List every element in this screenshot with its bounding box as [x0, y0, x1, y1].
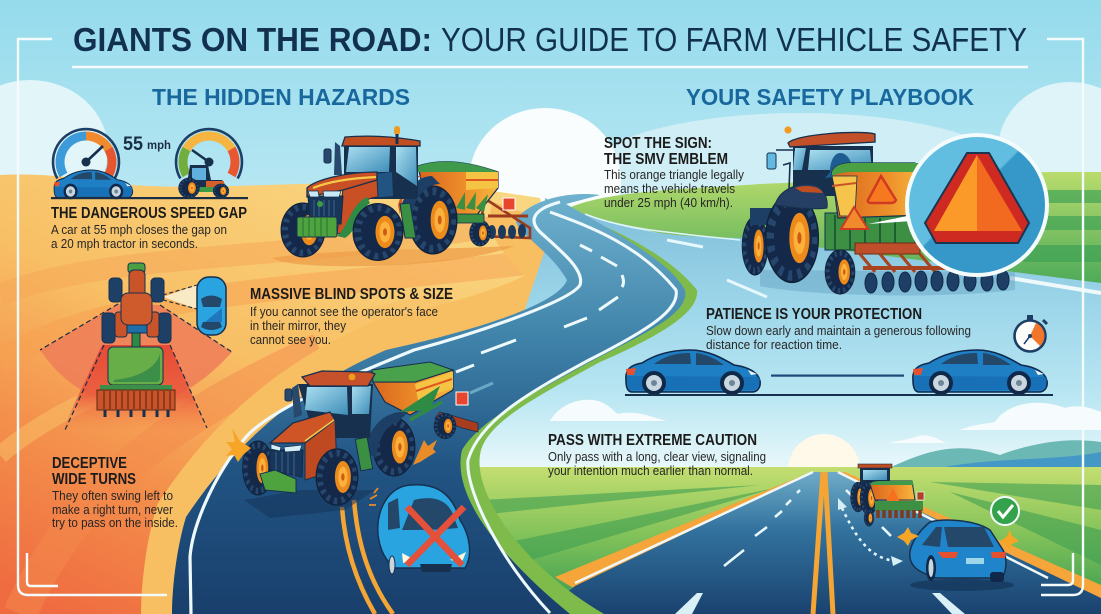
text block: speed gap: A car at 55 mph closes the gap on [51, 222, 227, 237]
panel: lower right fields and highway [440, 434, 1101, 614]
panel: right upper hill and light road [470, 172, 1101, 470]
tractor: hidden hazards hero [272, 126, 530, 266]
text block: pass with caution [548, 432, 766, 478]
title: GIANTS ON THE ROAD: [73, 21, 432, 58]
text block: smv emblem: under 25 mph (40 km/h). [604, 195, 733, 210]
top view car [197, 277, 226, 335]
icon: check mark [991, 497, 1019, 525]
icon: rear dust [413, 440, 437, 465]
text block: wide turns: DECEPTIVE [52, 455, 127, 472]
text block: blind spots [250, 286, 453, 347]
icon: stopwatch [1014, 315, 1047, 352]
panel: left sand field [0, 174, 567, 614]
text block: wide turns: try to pass on the inside. [52, 515, 178, 530]
text block: patience: PATIENCE IS YOUR PROTECTION [706, 306, 922, 323]
text block: blind spots: If you cannot see the operator's face [250, 304, 438, 319]
arrow: passing path [838, 498, 903, 566]
callout: magnified smv emblem [868, 135, 1047, 275]
text block: pass with caution: your intention much earlier than normal. [548, 463, 753, 478]
text block: patience: Slow down early and maintain a generous following [706, 323, 971, 338]
text block: pass with caution: Only pass with a long, clear view, signaling [548, 449, 766, 464]
tractor: highway distant [850, 464, 924, 526]
icon: collision spark [226, 428, 251, 462]
icon: right turn signal [1001, 530, 1019, 550]
text: 55 mph: 55 [123, 134, 143, 155]
text block: pass with caution: PASS WITH EXTREME CAUTION [548, 432, 757, 449]
car: passing rear view [910, 520, 1014, 591]
blind spot zones [40, 285, 232, 430]
text: 55 mph: mph [147, 138, 171, 152]
text block: speed gap [51, 205, 247, 251]
upper clouds [0, 80, 1101, 252]
text block: smv emblem: SPOT THE SIGN: [604, 135, 712, 152]
heading: safety playbook: YOUR SAFETY PLAYBOOK [686, 84, 974, 110]
diagram: following distance cars [625, 350, 1053, 396]
text block: blind spots: in their mirror, they [250, 318, 346, 333]
icon: left turn signal [897, 527, 919, 546]
text block: speed gap: a 20 mph tractor in seconds. [51, 236, 198, 251]
text block: patience: distance for reaction time. [706, 337, 842, 352]
diagram: tractor blind spots top view [40, 263, 232, 430]
icon: speed gauges with car and tractor [51, 129, 248, 199]
icon: impact marks [369, 488, 378, 505]
text block: patience [706, 306, 971, 352]
text block: smv emblem: THE SMV EMBLEM [604, 151, 728, 168]
text block: smv emblem [604, 135, 744, 210]
text: 55 mph [123, 134, 171, 155]
top view tractor [97, 263, 175, 417]
text block: speed gap: THE DANGEROUS SPEED GAP [51, 205, 247, 222]
car: do not pass [378, 485, 470, 574]
title subtitle: YOUR GUIDE TO FARM VEHICLE SAFETY [441, 21, 1027, 58]
panel: winding road [172, 194, 697, 614]
tractor: turning on road [242, 362, 478, 518]
text block: wide turns [52, 455, 178, 530]
heading: hidden hazards: THE HIDDEN HAZARDS [152, 84, 410, 110]
text block: wide turns: WIDE TURNS [52, 471, 136, 488]
text block: wide turns: make a right turn, never [52, 502, 174, 517]
tractor: smv emblem [742, 126, 1015, 296]
text block: blind spots: MASSIVE BLIND SPOTS & SIZE [250, 286, 453, 303]
icon: red x [407, 507, 464, 565]
text block: smv emblem: This orange triangle legally [604, 167, 744, 182]
lower clouds [550, 400, 1101, 443]
text block: wide turns: They often swing left to [52, 488, 173, 503]
text block: smv emblem: means the vehicle travels [604, 181, 735, 196]
text block: blind spots: cannot see you. [250, 332, 331, 347]
